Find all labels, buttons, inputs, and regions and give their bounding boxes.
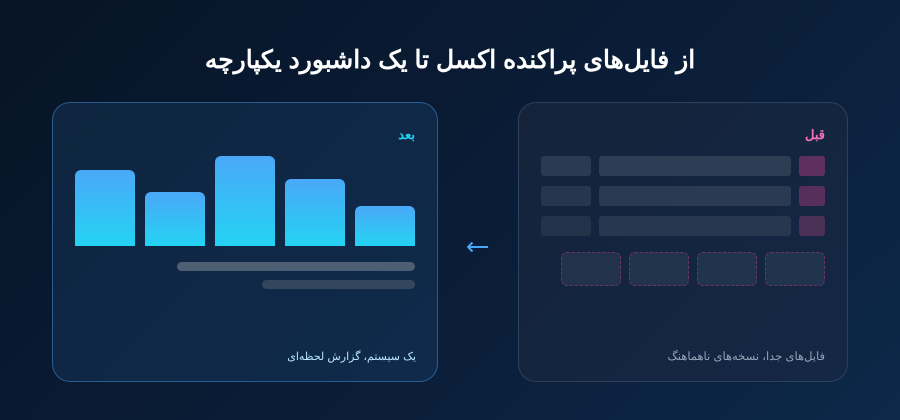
- summary line long: [177, 262, 415, 271]
- cell small: [541, 186, 591, 206]
- file box 3: [697, 252, 757, 286]
- bar 4: [285, 179, 345, 246]
- caption: after: یک سیستم، گزارش لحظه‌ای: [287, 351, 416, 363]
- cell wide: [599, 216, 791, 236]
- cell wide: [599, 156, 791, 176]
- spreadsheet row 1: [541, 156, 825, 176]
- spreadsheet row 2: [541, 186, 825, 206]
- file box 4: [765, 252, 825, 286]
- caption: before: فایل‌های جدا، نسخه‌های ناهماهنگ: [668, 351, 825, 363]
- file box 1: [561, 252, 621, 286]
- file box 2: [629, 252, 689, 286]
- title: از فایل‌های پراکنده اکسل تا یک داشبورد یکپارچه: [205, 46, 695, 74]
- heading: after: بعد: [398, 127, 415, 142]
- heading: before: قبل: [805, 127, 825, 142]
- bar chart: [75, 156, 415, 246]
- panel: before: [518, 102, 848, 382]
- bar 3: [215, 156, 275, 246]
- cell accent: [799, 216, 825, 236]
- cell accent: [799, 156, 825, 176]
- cell small: [541, 156, 591, 176]
- bar 2: [145, 192, 205, 246]
- arrow: [467, 242, 488, 252]
- dashed file boxes: [561, 252, 825, 286]
- panel: after: [52, 102, 438, 382]
- cell small: [541, 216, 591, 236]
- summary line short: [262, 280, 415, 289]
- bar 5: [355, 206, 415, 246]
- cell accent: [799, 186, 825, 206]
- spreadsheet row 3: [541, 216, 825, 236]
- bar 1: [75, 170, 135, 246]
- cell wide: [599, 186, 791, 206]
